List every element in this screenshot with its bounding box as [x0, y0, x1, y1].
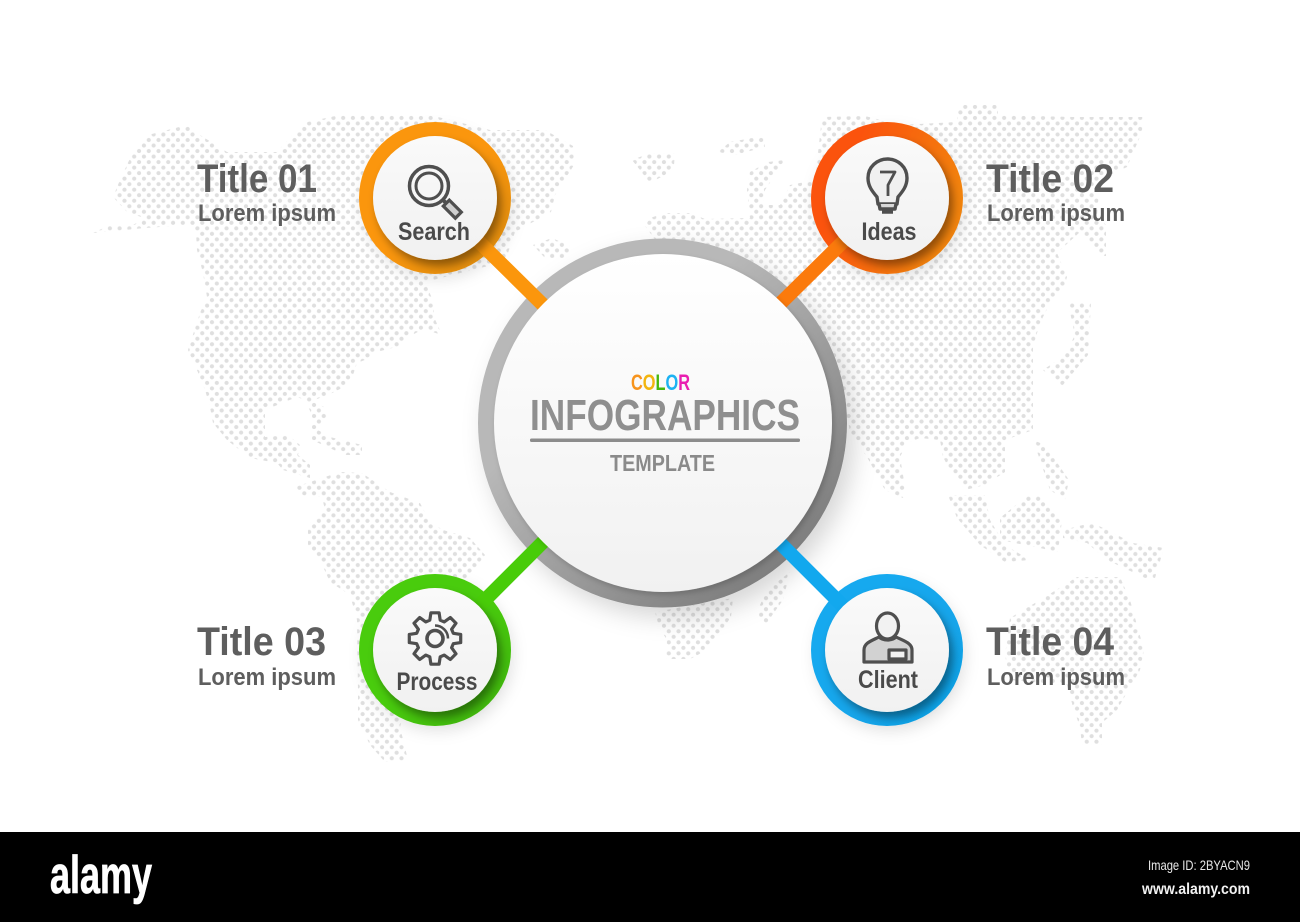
icon: light bulb	[868, 159, 907, 212]
node: Process	[359, 485, 600, 726]
text block: Title 01	[197, 157, 336, 227]
footer bar	[0, 832, 1300, 922]
icon: person	[864, 613, 912, 662]
icon: magnifier	[410, 166, 461, 218]
text block: Title 01: Title 01	[197, 157, 317, 201]
text block: Title 02: Lorem ipsum	[987, 200, 1125, 227]
dotted world map	[93, 105, 1164, 762]
central circle	[494, 254, 832, 592]
connector: Process	[465, 485, 600, 620]
text block: Title 04: Title 04	[986, 620, 1115, 664]
central ring	[478, 238, 847, 608]
node: Client	[722, 485, 963, 726]
label: Process: Process	[396, 668, 478, 696]
text block: Title 04	[986, 620, 1125, 691]
text block: Title 02: Title 02	[986, 157, 1114, 201]
text block: Title 03	[197, 620, 336, 691]
label: Ideas: Ideas	[862, 218, 916, 246]
connector: Ideas	[722, 228, 857, 361]
node: Search	[359, 122, 600, 361]
text block: Title 02	[986, 157, 1125, 227]
central title: COLOR: COLOR	[631, 370, 690, 395]
text block: Title 04: Lorem ipsum	[987, 664, 1125, 691]
node: Ideas	[722, 122, 963, 361]
footer logo: alamy	[50, 846, 152, 905]
connector: Client	[722, 485, 857, 620]
central title: INFOGRAPHICS: INFOGRAPHICS	[530, 391, 800, 440]
label: Client: Client	[858, 666, 919, 694]
footer image id: Image ID: 2BYACN9	[1148, 857, 1250, 873]
connector: Search	[465, 228, 600, 361]
label: Search: Search	[398, 218, 470, 246]
text block: Title 03: Lorem ipsum	[198, 664, 336, 691]
icon: gear	[409, 613, 461, 664]
text block: Title 03: Title 03	[197, 620, 326, 664]
central title: TEMPLATE: TEMPLATE	[610, 450, 715, 476]
text block: Title 01: Lorem ipsum	[198, 200, 336, 227]
footer url: www.alamy.com	[1141, 881, 1250, 898]
central title rule	[530, 438, 800, 442]
